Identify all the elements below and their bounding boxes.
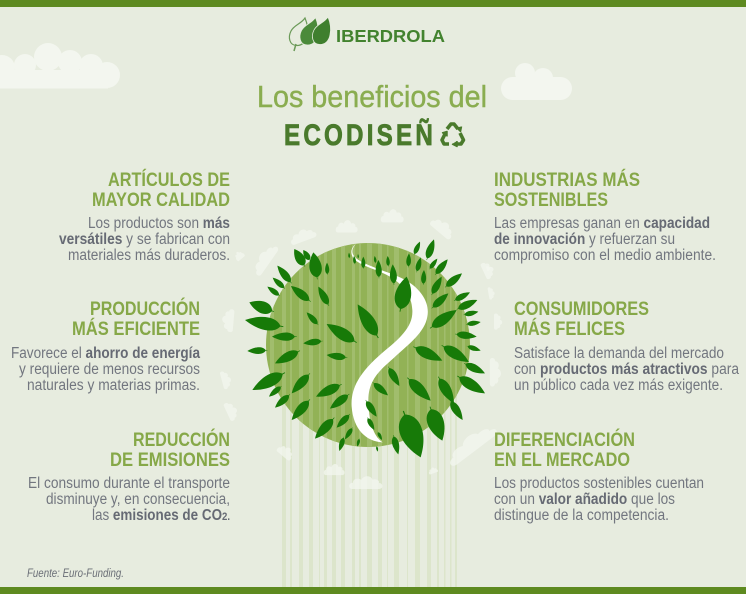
heading [494,168,640,211]
logo: Iberdrola [289,17,445,51]
globe [244,238,488,461]
body text: con un valor añadido que los [494,491,675,508]
heading: MAYOR CALIDAD [92,189,230,211]
white river [351,244,428,442]
title line 1: Los beneficios del [257,80,487,114]
body text [28,475,230,524]
panel: diferenciación en el mercado [494,427,704,524]
heading: MÁS FELICES [514,317,625,340]
heading: PRODUCCIÓN [90,296,200,320]
heading: ARTÍCULOS DE [108,168,230,191]
heading: CONSUMIDORES [514,298,649,320]
panel: reducción de emisiones [28,427,230,524]
body text [494,215,716,264]
body text: Favorece el ahorro de energía [11,345,200,362]
body text: Los productos sostenibles cuentan [494,475,704,492]
heading: MÁS EFICIENTE [72,317,200,340]
heading: DE EMISIONES [110,449,230,471]
cloud: top right [501,63,572,100]
top bar [0,0,746,7]
bottom bar [0,587,746,594]
body text: un público cada vez más exigente. [514,377,723,394]
body text: Satisface la demanda del mercado [514,345,724,362]
body text: Los productos son más [88,215,230,232]
body text: materiales más duraderos. [68,247,230,264]
panel: consumidores más felices [514,298,739,394]
heading [92,168,230,211]
body text: versátiles y se fabrican con [59,231,230,248]
body text [494,475,704,524]
heading [72,296,200,340]
heading: INDUSTRIAS MÁS [494,168,640,191]
panel: industrias más sostenibles [494,168,716,264]
heading: SOSTENIBLES [494,189,608,211]
small clouds around globe [220,209,502,489]
body text: con productos más atractivos para [514,361,739,378]
heading: DIFERENCIACIÓN [494,427,635,451]
source note: Fuente: Euro-Funding. [27,568,124,580]
body text: Las empresas ganan en capacidad [494,215,710,232]
icon: recycling [442,124,464,146]
heading [494,427,635,471]
cloud: top left [0,43,120,88]
panel: producción más eficiente [11,296,200,394]
heading [110,427,230,471]
body text: distingue de la competencia. [494,507,669,524]
body text [514,345,739,394]
heading: EN EL MERCADO [494,449,630,471]
body text [59,215,230,264]
heading [514,298,649,340]
stripes falling below globe [282,345,457,587]
logo leaves [289,17,331,51]
title line 2: ECODISEÑ [284,118,436,152]
heading: REDUCCIÓN [133,427,230,451]
panel: artículos de mayor calidad [59,168,230,264]
body text: de innovación y refuerzan su [494,231,675,248]
body text: y requiere de menos recursos [19,361,200,378]
title [257,80,487,152]
body text: disminuye y, en consecuencia, [46,491,230,508]
logo wordmark: IBERDROLA [336,26,445,46]
body text: naturales y materias primas. [27,377,200,394]
globe stripes [270,240,465,450]
globe disc [266,243,470,447]
body text: El consumo durante el transporte [28,475,230,492]
body text: compromiso con el medio ambiente. [494,247,716,264]
body text [11,345,200,394]
leaves [244,238,488,461]
body text: las emisiones de CO2. [92,507,230,524]
